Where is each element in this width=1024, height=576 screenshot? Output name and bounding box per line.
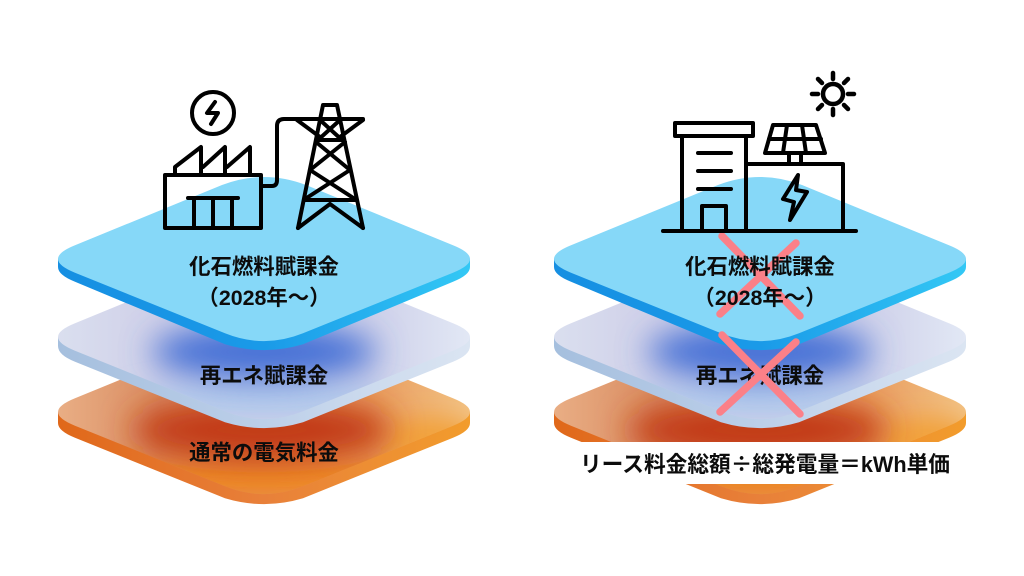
icon: building with solar panel and sun: [663, 73, 856, 231]
label: from 2028 (right): （2028年～）: [693, 286, 827, 310]
cross mark over fossil fuel surcharge: [720, 236, 800, 316]
label: renewable surcharge: 再エネ賦課金: [200, 364, 328, 388]
icon: battery box with bolt: [746, 164, 843, 231]
icon: solar panel: [765, 125, 825, 164]
formula band: [553, 442, 967, 484]
icon: sun: [812, 73, 854, 115]
label: fossil fuel surcharge (right): 化石燃料賦課金: [685, 255, 835, 279]
layer: regular electricity charge (orange): [58, 380, 470, 504]
label: from 2028: （2028年～）: [197, 286, 331, 310]
power line: [262, 119, 363, 186]
layer: fossil fuel surcharge (sky blue): [554, 177, 966, 350]
icon: factory: [165, 147, 261, 228]
cross mark over renewable surcharge: [720, 335, 800, 414]
label: fossil fuel surcharge: 化石燃料賦課金: [189, 255, 339, 279]
formula text: リース料金総額÷総発電量＝kWh単価: [580, 447, 950, 479]
label: renewable surcharge: 再エネ賦課金: [696, 364, 824, 388]
icon: lightning circle: [192, 92, 234, 134]
layer: renewable surcharge (blue-lavender): [554, 302, 966, 428]
icon: transmission tower: [297, 105, 363, 228]
right stack of fee layers: [554, 177, 976, 504]
layer: fossil fuel surcharge (sky blue): [58, 177, 470, 350]
left stack of fee layers: [58, 177, 480, 504]
label: regular electricity: 通常の電気料金: [189, 441, 339, 465]
layer: regular electricity charge (orange): [554, 380, 966, 504]
icon: building: [675, 123, 753, 231]
layer: renewable surcharge (blue-lavender): [58, 302, 470, 428]
ground line: [663, 229, 856, 233]
icon: factory and transmission tower: [165, 92, 363, 228]
